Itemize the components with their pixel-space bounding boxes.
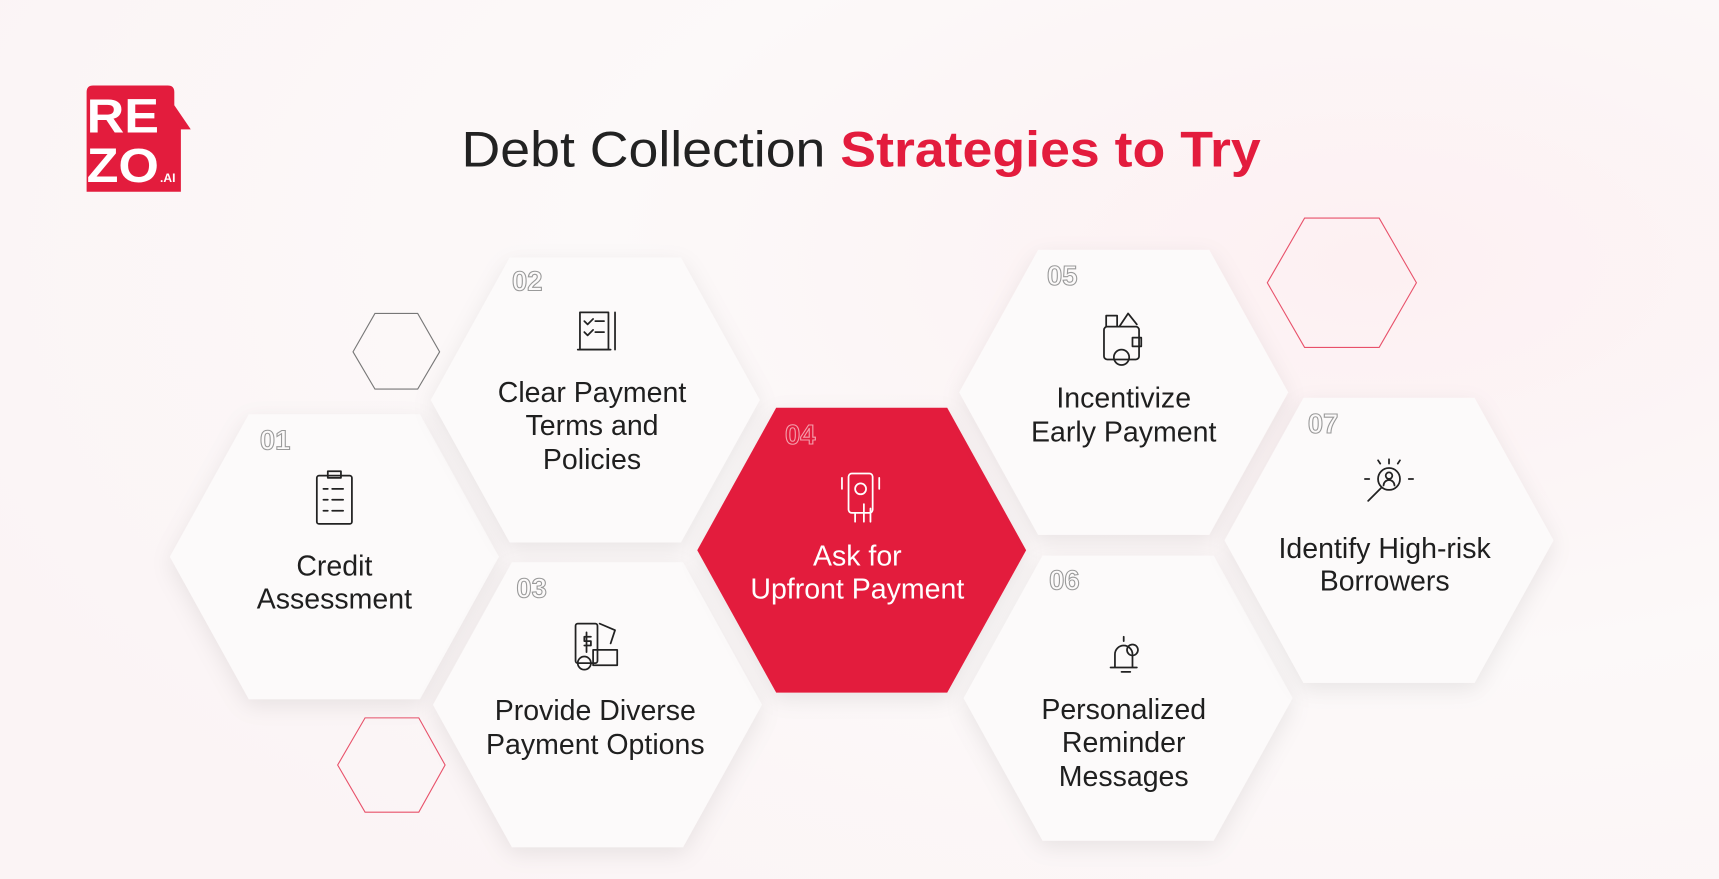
hexagon 01 bbox=[170, 414, 499, 699]
icon: phone payment bbox=[842, 473, 879, 522]
hexagon 06: Reminder bbox=[1062, 727, 1186, 759]
hexagon 02: Policies bbox=[543, 444, 641, 476]
icon: policy document bbox=[578, 312, 615, 350]
hexagon 05: Incentivize bbox=[1056, 383, 1191, 415]
hexagon 05: 05 bbox=[1047, 260, 1077, 291]
hexagon 03 bbox=[433, 562, 762, 847]
icon: clipboard bbox=[317, 471, 352, 524]
logo: ZO bbox=[87, 139, 159, 193]
icon: payment options bbox=[576, 624, 617, 670]
hexagon 07: Identify High-risk bbox=[1278, 533, 1492, 565]
icon: wallet bbox=[1104, 313, 1141, 365]
hexagon 02: Clear Payment bbox=[498, 377, 686, 409]
outline hexagon pink top right bbox=[1267, 218, 1416, 347]
hexagon 01: 01 bbox=[260, 424, 290, 455]
hexagon 03: Provide Diverse bbox=[495, 695, 696, 727]
hexagon 05: Early Payment bbox=[1031, 417, 1216, 449]
logo: .AI bbox=[160, 171, 175, 185]
hexagon 06: Messages bbox=[1059, 761, 1189, 793]
hexagon 04 highlighted: 04 bbox=[785, 419, 816, 450]
hexagon 03: 03 bbox=[516, 572, 547, 603]
title: Debt Collection Strategies to Try bbox=[462, 121, 1261, 178]
outline hexagon pink bottom bbox=[338, 718, 445, 812]
icon: search person bbox=[1365, 459, 1413, 501]
hexagon 01: Credit bbox=[296, 550, 372, 582]
hexagon 05 bbox=[959, 250, 1288, 535]
hexagon 03: Payment Options bbox=[486, 729, 705, 761]
hexagon 04 highlighted bbox=[697, 408, 1026, 693]
hexagon 02: Terms and bbox=[525, 410, 659, 442]
hexagon 02 bbox=[431, 258, 760, 543]
logo bbox=[87, 85, 191, 193]
hexagon 07: 07 bbox=[1308, 408, 1338, 439]
hexagon 04 highlighted: Upfront Payment bbox=[750, 573, 964, 605]
hexagon 02: 02 bbox=[512, 265, 542, 296]
hexagon 07 bbox=[1225, 398, 1553, 683]
logo: RE bbox=[87, 90, 159, 144]
outline hexagon gray bbox=[353, 313, 440, 389]
hexagon 01: Assessment bbox=[257, 583, 412, 615]
hexagon 06 bbox=[964, 556, 1293, 841]
icon: bell bbox=[1111, 637, 1138, 672]
hexagon 06: Personalized bbox=[1041, 694, 1206, 726]
hexagon 06: 06 bbox=[1049, 565, 1080, 596]
hexagon 04 highlighted: Ask for bbox=[813, 541, 902, 573]
hexagon 07: Borrowers bbox=[1320, 566, 1450, 598]
